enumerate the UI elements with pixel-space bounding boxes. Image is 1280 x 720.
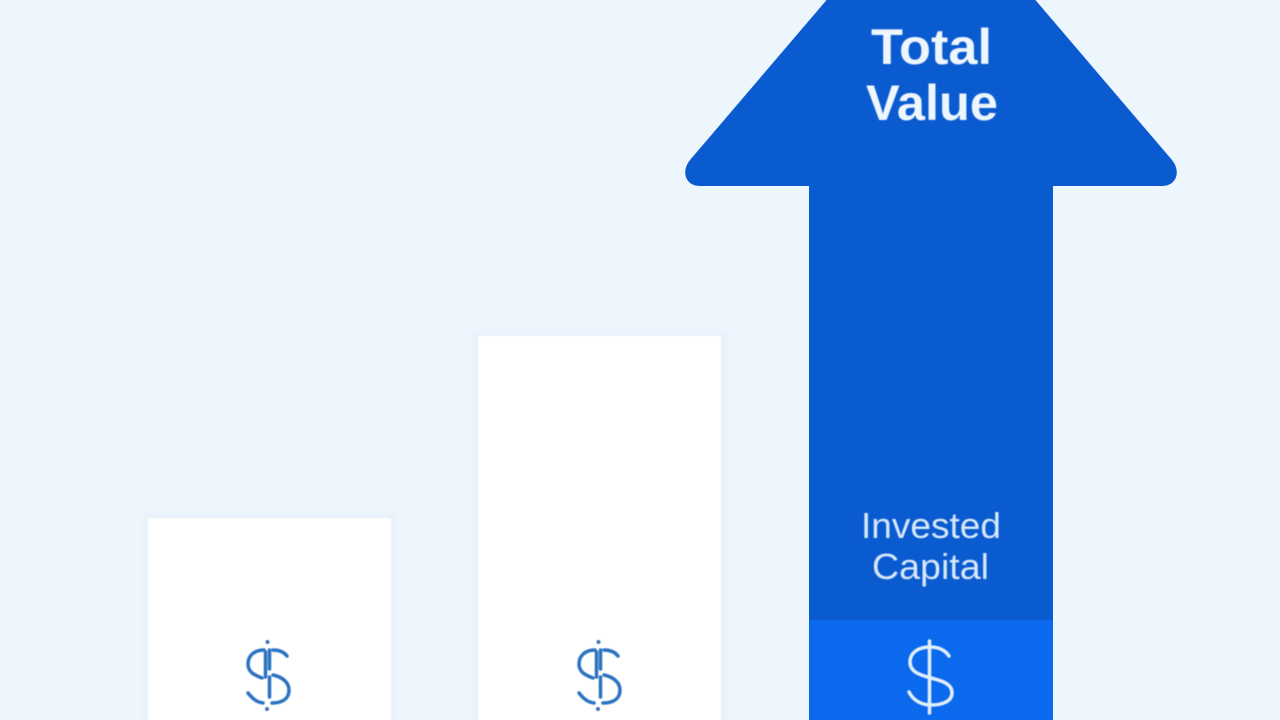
label: invested capital: Invested (861, 505, 1001, 546)
bar: small white column with dollar icon (143, 514, 396, 720)
segment: invested capital base (809, 620, 1053, 720)
heading: total value: Value (866, 75, 998, 131)
icon: dollar sign, medium bar (579, 640, 620, 711)
bar: medium white column with dollar icon (473, 332, 726, 720)
arrow: total value column (685, 0, 1177, 720)
icon: dollar sign, small bar (248, 640, 289, 711)
label: invested capital (861, 505, 1001, 587)
icon: dollar sign, arrow base (909, 641, 952, 713)
heading: total value: Total (871, 19, 992, 75)
label: invested capital: Capital (872, 546, 989, 587)
heading: total value (866, 19, 998, 131)
